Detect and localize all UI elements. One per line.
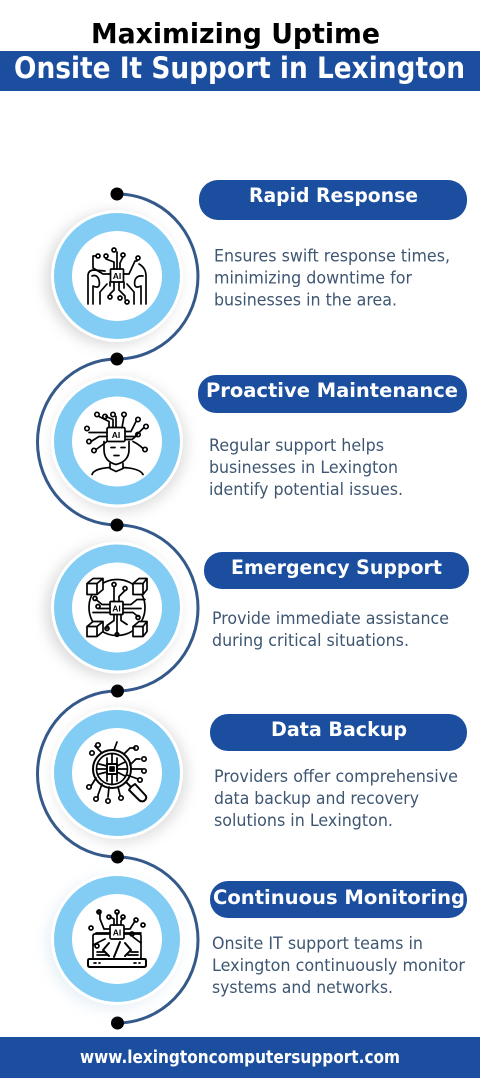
step 2 text: [209, 436, 403, 500]
connector dots: [110, 188, 124, 1030]
step 4 text: data backup and recovery: [214, 789, 419, 809]
footer banner: [0, 1037, 480, 1078]
step 3 heading pill: [204, 552, 469, 589]
step 2 heading pill: Proactive Maintenance: [206, 379, 458, 402]
connector line: [37, 194, 198, 1023]
step 4 text: Providers offer comprehensive: [214, 767, 458, 787]
step 1 text: [214, 246, 450, 310]
step 4 circle: [51, 707, 187, 842]
step 4 text: solutions in Lexington.: [214, 811, 393, 831]
step 1 heading pill: [199, 180, 467, 220]
step 1 text: minimizing downtime for: [214, 268, 412, 288]
step 1 heading pill: Rapid Response: [249, 184, 418, 207]
step 5 heading pill: Continuous Monitoring: [213, 886, 465, 909]
step 2 circle: [51, 376, 186, 512]
icon: AI chip with hands: AI: [113, 271, 121, 281]
step 5 text: Onsite IT support teams in: [212, 934, 423, 954]
step 4 text: [214, 767, 458, 831]
step 3 heading pill: Emergency Support: [231, 556, 442, 579]
step 3 text: [212, 609, 449, 651]
step 5 text: Lexington continuously monitor: [212, 956, 465, 976]
icon: magnifier over chip: [87, 742, 146, 803]
step 3 text: during critical situations.: [212, 631, 409, 651]
step 1 circle: [46, 210, 183, 345]
step 2 heading pill: [198, 375, 467, 413]
step 2 text: Regular support helps: [209, 436, 384, 456]
step 5 text: [212, 934, 465, 998]
title: Maximizing Uptime: [91, 17, 380, 50]
step 4 heading pill: [210, 714, 467, 751]
footer banner: www.lexingtoncomputersupport.com: [80, 1048, 400, 1068]
step 1 text: businesses in the area.: [214, 290, 397, 310]
icon: AI head: AI: [112, 430, 120, 440]
icon: AI laptop: AI: [113, 927, 121, 937]
step 5 circle: [47, 873, 183, 1009]
step 2 text: businesses in Lexington: [209, 458, 398, 478]
step 5 heading pill: [210, 881, 467, 918]
step 3 circle: [46, 542, 183, 676]
step 5 text: systems and networks.: [212, 978, 393, 998]
step 1 text: Ensures swift response times,: [214, 246, 450, 266]
step 2 text: identify potential issues.: [209, 480, 403, 500]
icon: AI chip with cubes: AI: [112, 603, 121, 613]
step 4 heading pill: Data Backup: [271, 718, 407, 741]
step 3 text: Provide immediate assistance: [212, 609, 449, 629]
